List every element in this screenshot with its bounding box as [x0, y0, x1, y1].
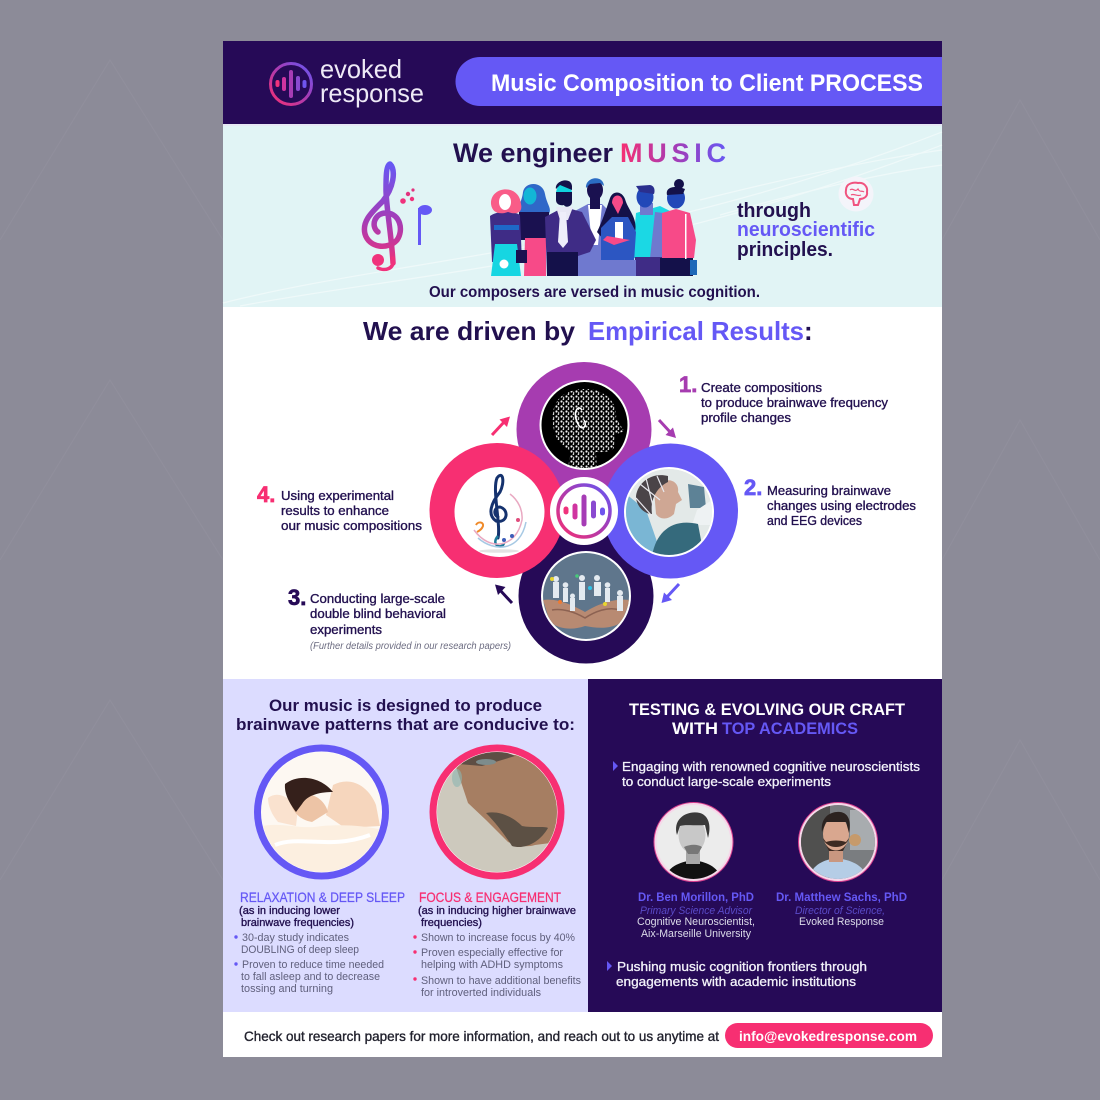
person: back man — [576, 178, 606, 276]
header band — [223, 41, 942, 124]
panel: we engineer music — [223, 124, 942, 307]
heading: brainwave patterns: Our music is designed to produce — [269, 696, 542, 715]
step 2 text: changes using electrodes — [767, 498, 916, 513]
step 2 text — [744, 475, 916, 528]
person: pink hair woman — [490, 189, 527, 276]
list: relaxation and deep sleep: (as in inducing lower — [239, 905, 340, 917]
text: through neuroscientific principles: principles. — [737, 238, 833, 261]
bullet: engaging neuroscientists — [613, 759, 921, 789]
heading: top academics: WITH — [672, 719, 718, 738]
title banner — [456, 57, 942, 106]
list: relaxation and deep sleep: DOUBLING of deep sleep — [241, 944, 359, 956]
person: bearded man with tie — [545, 180, 596, 276]
step ring: purple head — [516, 362, 652, 497]
step 4 text: our music compositions — [281, 518, 423, 533]
person: pink coat woman — [660, 179, 697, 276]
heading: top academics: TOP ACADEMICS — [722, 719, 858, 738]
heading: empirical results: Empirical Results — [588, 316, 804, 346]
text: through neuroscientific principles: through — [737, 199, 811, 222]
step 2 text: 2. — [744, 475, 762, 500]
cycle diagram — [430, 362, 738, 664]
arrow: blue — [662, 584, 679, 603]
footer — [223, 1012, 942, 1057]
panel: brainwave patterns — [223, 679, 588, 1012]
step 4 text: 4. — [257, 482, 275, 507]
step 2 text: and EEG devices — [767, 513, 862, 528]
caption: Matthew Sachs: Evoked Response — [799, 916, 884, 928]
bullet: pushing frontiers — [607, 959, 867, 989]
step ring: dark hands — [518, 528, 654, 664]
email button: info@evokedresponse.com — [739, 1028, 917, 1044]
list: focus and engagement: Shown to have additional benefits — [421, 975, 581, 987]
step 3 text: (Further details provided in our research papers) — [310, 641, 511, 652]
caption: Matthew Sachs: Director of Science, — [795, 905, 885, 917]
list: relaxation and deep sleep: Proven to reduce time needed — [242, 959, 384, 971]
step 3 text: double blind behavioral — [310, 606, 446, 621]
heading: empirical results — [363, 316, 813, 346]
center logo — [550, 477, 618, 545]
step 2 text: Measuring brainwave — [767, 483, 891, 498]
step 1 text: to produce brainwave frequency — [701, 395, 888, 410]
step ring: blue EEG — [603, 444, 738, 578]
bullet: engaging neuroscientists: to conduct large-scale experiments — [622, 774, 832, 789]
list: focus and engagement: frequencies) — [421, 917, 482, 929]
caption: Matthew Sachs — [776, 890, 907, 928]
heading: we engineer music: MUSIC — [620, 138, 726, 168]
heading: brainwave patterns — [236, 696, 575, 734]
step 3 text: experiments — [310, 622, 383, 637]
logo: evoked response: evoked — [320, 54, 402, 84]
heading: empirical results: We are driven by — [363, 316, 576, 346]
title banner: Music Composition to Client PROCESS — [491, 70, 923, 97]
list: focus and engagement: Shown to increase focus by 40% — [421, 932, 575, 944]
list: focus and engagement — [413, 889, 581, 999]
list: focus and engagement: Proven especially effective for — [421, 947, 563, 959]
step 3 text — [288, 585, 511, 652]
caption: Ben Morillon: Aix-Marseille University — [641, 928, 751, 940]
heading: top academics — [629, 700, 906, 738]
photo: focused man — [430, 744, 564, 880]
list: relaxation and deep sleep: 30-day study indicates — [242, 932, 349, 944]
list: relaxation and deep sleep: RELAXATION & DEEP SLEEP — [240, 889, 405, 905]
email button — [725, 1023, 933, 1048]
person: hoodie man — [634, 185, 670, 276]
heading: empirical results: : — [804, 316, 813, 346]
caption: Ben Morillon — [637, 890, 755, 940]
step 4 text: Using experimental — [281, 488, 394, 503]
list: relaxation and deep sleep: tossing and turning — [241, 983, 333, 995]
footer: Check out research papers for more information, and reach out to us anytime at — [244, 1028, 719, 1044]
logo: evoked response — [270, 54, 424, 108]
portrait: Matthew Sachs — [798, 802, 880, 882]
heading: brainwave patterns: brainwave patterns that are conducive to: — [236, 715, 575, 734]
text: through neuroscientific principles: neuroscientific — [737, 218, 875, 241]
list: relaxation and deep sleep: to fall asleep and to decrease — [241, 971, 380, 983]
panel: testing and evolving — [588, 679, 942, 1012]
step 1 text: Create compositions — [701, 380, 823, 395]
list: focus and engagement: helping with ADHD symptoms — [421, 959, 563, 971]
bullet: pushing frontiers: Pushing music cognition frontiers through — [617, 959, 867, 974]
list: focus and engagement: FOCUS & ENGAGEMENT — [419, 889, 561, 905]
heading: we engineer music: We engineer — [453, 138, 613, 168]
caption: Ben Morillon: Cognitive Neuroscientist, — [637, 916, 755, 928]
photo: sleeping woman — [254, 744, 389, 880]
heading: top academics: TESTING & EVOLVING OUR CRAFT — [629, 700, 906, 719]
caption: Ben Morillon: Primary Science Advisor — [640, 905, 753, 917]
step 3 text: Conducting large-scale — [310, 591, 445, 606]
icon: brain — [838, 176, 874, 212]
arrow: pink — [492, 416, 510, 435]
step 1 text: profile changes — [701, 410, 792, 425]
icon: treble clef and note — [364, 164, 432, 269]
list: focus and engagement: for introverted individuals — [421, 987, 541, 999]
step 1 text — [679, 372, 888, 425]
arrow: dark — [495, 584, 512, 603]
logo: evoked response: response — [320, 78, 424, 108]
step 4 text — [257, 482, 423, 533]
person: woman with glasses — [519, 184, 550, 276]
list: relaxation and deep sleep: brainwave frequencies) — [241, 917, 354, 929]
list: focus and engagement: (as in inducing higher brainwave — [418, 905, 576, 917]
arrow: purple — [659, 420, 676, 438]
step 4 text: results to enhance — [281, 503, 389, 518]
caption: composers: Our composers are versed in music cognition. — [429, 284, 760, 301]
step 3 text: 3. — [288, 585, 306, 610]
text: through neuroscientific principles — [737, 199, 875, 261]
caption: Ben Morillon: Dr. Ben Morillon, PhD — [638, 890, 754, 904]
step ring: pink music — [430, 443, 564, 578]
panel: empirical results — [223, 307, 942, 679]
portrait: Ben Morillon — [654, 802, 733, 882]
bullet: pushing frontiers: engagements with academic institutions — [616, 974, 857, 989]
caption: Matthew Sachs: Dr. Matthew Sachs, PhD — [776, 890, 907, 904]
list: relaxation and deep sleep — [234, 889, 405, 995]
heading: we engineer music — [453, 138, 726, 168]
illustration: group of people — [490, 178, 697, 276]
step 1 text: 1. — [679, 372, 697, 397]
person: woman with crossed arms — [597, 192, 636, 276]
bullet: engaging neuroscientists: Engaging with renowned cognitive neuroscientists — [622, 759, 921, 774]
